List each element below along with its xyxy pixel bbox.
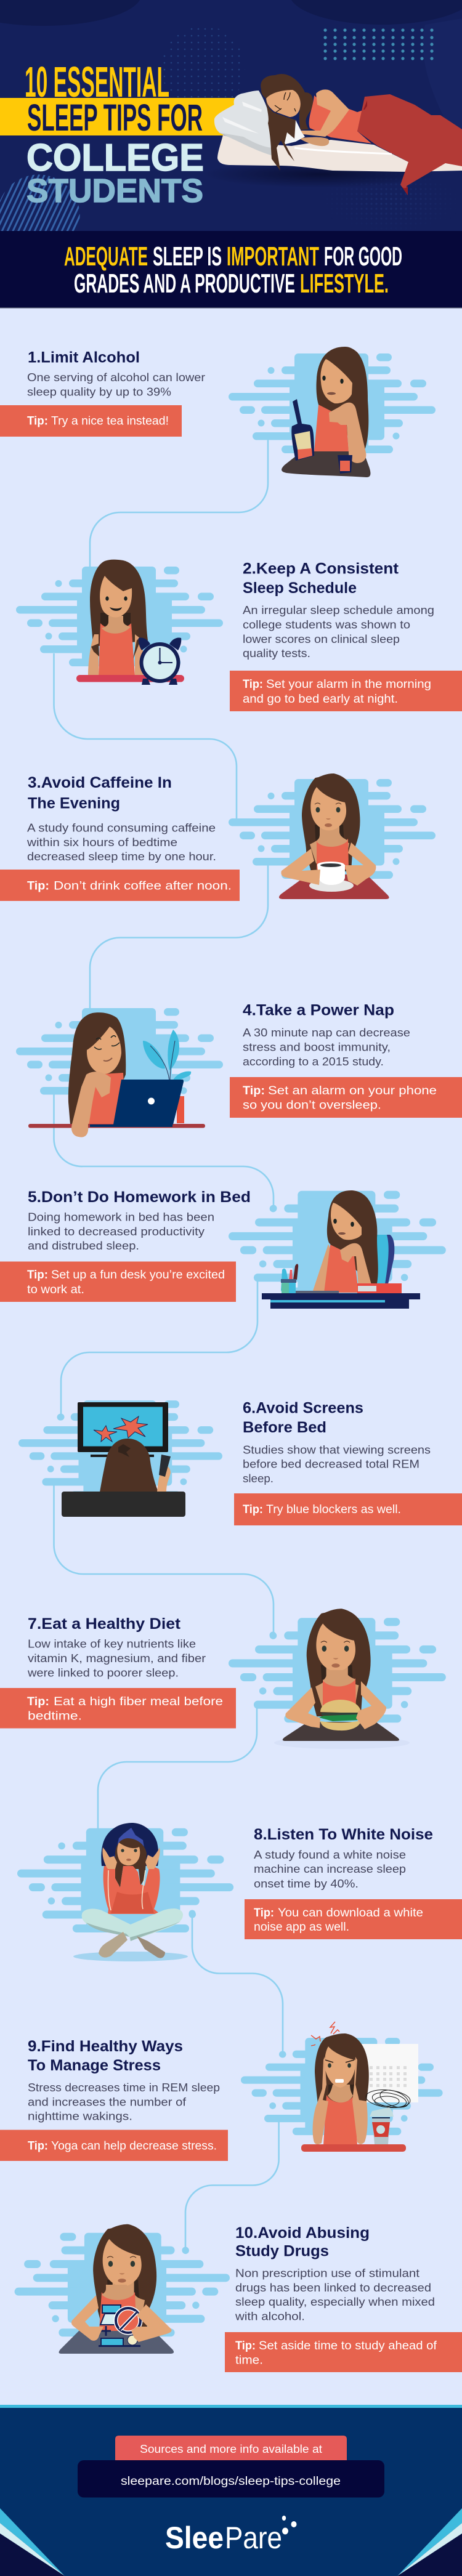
body text: Non prescription use of stimulant bbox=[235, 2267, 419, 2280]
illustration: girl rejecting pills bbox=[15, 2224, 230, 2354]
heading: 1.Limit Alcohol bbox=[28, 349, 140, 366]
body text: Low intake of key nutrients like bbox=[28, 1638, 196, 1650]
heading: 7.Eat a Healthy Diet bbox=[28, 1615, 181, 1633]
tip box: noise app as well. bbox=[254, 1921, 349, 1934]
illustration: girl with alcohol bbox=[229, 347, 436, 477]
panel: tip 5 homework in bed bbox=[0, 1189, 446, 1309]
body text bbox=[27, 1638, 206, 1679]
body text bbox=[28, 2081, 220, 2122]
body text: Doing homework in bed has been bbox=[28, 1211, 214, 1223]
heading bbox=[243, 560, 399, 597]
tip box bbox=[0, 405, 182, 437]
tip box: so you don’t oversleep. bbox=[243, 1099, 381, 1112]
tip box: Try blue blockers as well. bbox=[266, 1503, 401, 1516]
heading: Study Drugs bbox=[235, 2243, 329, 2260]
source url bbox=[78, 2460, 384, 2498]
heading: Before Bed bbox=[243, 1419, 326, 1436]
body text bbox=[243, 1027, 410, 1068]
body text: Stress decreases time in REM sleep bbox=[28, 2081, 220, 2094]
illustration: girl at desk bbox=[229, 1190, 446, 1309]
body text: with alcohol. bbox=[235, 2311, 305, 2323]
heading: 4.Take a Power Nap bbox=[243, 1001, 394, 1019]
illustration: girl with coffee bbox=[229, 773, 436, 899]
body text: A study found a white noise bbox=[254, 1849, 406, 1861]
tip box: bedtime. bbox=[28, 1710, 82, 1723]
tip box bbox=[0, 1261, 236, 1302]
illustration: girl napping at laptop bbox=[16, 1008, 223, 1137]
panel: tip 3 avoid caffeine bbox=[0, 773, 436, 901]
body text: nighttime wakings. bbox=[28, 2110, 132, 2122]
connector path between tips bbox=[54, 440, 286, 2254]
panel: tip 9 manage stress bbox=[0, 2022, 443, 2161]
heading bbox=[235, 2224, 370, 2260]
tip box: Tip: bbox=[243, 678, 263, 691]
heading: 5.Don’t Do Homework in Bed bbox=[28, 1189, 251, 1206]
tip box: Tip: bbox=[27, 1695, 49, 1708]
title: SLEEP TIPS FOR bbox=[27, 97, 203, 139]
body text: lower scores on clinical sleep bbox=[243, 633, 400, 645]
logo: Pare bbox=[225, 2521, 282, 2555]
intro band: SLEEP IS bbox=[153, 241, 222, 272]
title band bbox=[0, 98, 243, 135]
body text bbox=[243, 604, 434, 660]
tip box: Tip: bbox=[27, 879, 49, 893]
heading: 9.Find Healthy Ways bbox=[28, 2038, 183, 2055]
body text: according to a 2015 study. bbox=[243, 1056, 384, 1068]
intro band: ADEQUATE bbox=[64, 241, 148, 272]
body text: were linked to poorer sleep. bbox=[27, 1666, 179, 1679]
panel: tip 2 consistent sleep schedule bbox=[16, 560, 462, 711]
heading: 8.Listen To White Noise bbox=[254, 1826, 433, 1843]
body text: vitamin K, magnesium, and fiber bbox=[28, 1652, 206, 1665]
body text: and distrubed sleep. bbox=[28, 1240, 139, 1252]
tip box bbox=[245, 1899, 462, 1939]
tip box bbox=[230, 671, 462, 711]
body text: within six hours of bedtime bbox=[26, 836, 177, 849]
body text: before bed decreased total REM bbox=[243, 1458, 419, 1471]
sources label: Sources and more info available at bbox=[140, 2443, 322, 2455]
tip box: Set up a fun desk you’re excited bbox=[51, 1269, 225, 1282]
body text bbox=[27, 371, 205, 398]
logo bbox=[165, 2516, 297, 2555]
tip box: Tip: bbox=[28, 2139, 48, 2153]
tip box: Yoga can help decrease stress. bbox=[51, 2139, 217, 2153]
body text: A 30 minute nap can decrease bbox=[243, 1027, 410, 1039]
body text: machine can increase sleep bbox=[254, 1863, 406, 1875]
tip box bbox=[0, 2130, 228, 2161]
heading: 3.Avoid Caffeine In bbox=[28, 774, 172, 791]
title bbox=[25, 58, 204, 209]
intro band: IMPORTANT bbox=[227, 241, 319, 272]
panel: tip 8 white noise bbox=[17, 1823, 462, 1961]
panel: tip 1 limit alcohol bbox=[0, 347, 436, 477]
illustration: girl with burger bbox=[229, 1609, 446, 1749]
title: COLLEGE bbox=[26, 137, 204, 179]
heading: 10.Avoid Abusing bbox=[235, 2224, 370, 2242]
body text bbox=[28, 1211, 214, 1252]
tip box: Tip: bbox=[235, 2340, 256, 2352]
tip box: Tip: bbox=[243, 1503, 263, 1516]
heading: Sleep Schedule bbox=[243, 579, 357, 597]
body text bbox=[243, 1443, 431, 1485]
heading bbox=[243, 1399, 363, 1436]
body text: A study found consuming caffeine bbox=[27, 822, 216, 834]
sources label bbox=[115, 2436, 347, 2460]
body text: An irregular sleep schedule among bbox=[243, 604, 434, 616]
title: STUDENTS bbox=[26, 172, 203, 209]
body text: Studies show that viewing screens bbox=[243, 1443, 431, 1456]
body text: college students was shown to bbox=[243, 618, 410, 631]
footer bbox=[0, 2405, 462, 2576]
tip box: Tip: bbox=[27, 1269, 48, 1282]
body text: stress and boost immunity, bbox=[243, 1041, 391, 1053]
tip box bbox=[225, 2332, 462, 2372]
tip box: Tip: bbox=[27, 415, 48, 427]
panel: tip 4 power nap bbox=[16, 1001, 462, 1137]
tip box: Tip: bbox=[254, 1907, 274, 1920]
source url: sleepare.com/blogs/sleep-tips-college bbox=[121, 2475, 341, 2488]
tip box: Eat a high fiber meal before bbox=[54, 1695, 223, 1708]
intro band bbox=[0, 231, 462, 308]
corner accent left bbox=[0, 2508, 65, 2576]
tip box: time. bbox=[235, 2354, 263, 2367]
illustration: girl watching tv bbox=[18, 1400, 222, 1517]
body text: One serving of alcohol can lower bbox=[27, 371, 205, 384]
tip box: Set your alarm in the morning bbox=[266, 678, 431, 691]
illustration: stressed girl with calendar and coffee bbox=[241, 2022, 443, 2152]
tip box bbox=[230, 1077, 462, 1118]
body text: sleep quality, especially when mixed bbox=[235, 2296, 435, 2308]
illustration: girl with alarm clock bbox=[16, 560, 223, 685]
tip box bbox=[234, 1493, 462, 1525]
panel: tip 10 study drugs bbox=[15, 2224, 462, 2372]
body text: onset time by 40%. bbox=[254, 1878, 359, 1890]
heading: 6.Avoid Screens bbox=[243, 1399, 363, 1416]
body text bbox=[26, 822, 216, 863]
tip box: You can download a white bbox=[278, 1907, 423, 1920]
tip box: Set an alarm on your phone bbox=[268, 1084, 437, 1097]
tip box: to work at. bbox=[27, 1283, 84, 1296]
tip box: Don’t drink coffee after noon. bbox=[54, 879, 232, 893]
body text: linked to decreased productivity bbox=[28, 1225, 205, 1238]
heading: 2.Keep A Consistent bbox=[243, 560, 399, 578]
tip box: Tip: bbox=[243, 1084, 265, 1097]
title: 10 ESSENTIAL bbox=[25, 58, 169, 106]
tip box bbox=[0, 870, 240, 901]
tip box: Set aside time to study ahead of bbox=[259, 2340, 437, 2352]
illustration: sleeping girl bbox=[203, 74, 462, 195]
tip box: and go to bed early at night. bbox=[243, 693, 398, 706]
body text bbox=[254, 1849, 406, 1890]
body text: sleep quality by up to 39% bbox=[27, 386, 171, 398]
illustration: girl with pillow on head bbox=[17, 1823, 233, 1961]
body text: sleep. bbox=[243, 1472, 274, 1485]
body text: and increases the number of bbox=[28, 2096, 187, 2109]
intro band: GRADES AND A PRODUCTIVE bbox=[74, 269, 295, 299]
body text bbox=[235, 2267, 435, 2323]
corner accent right bbox=[397, 2508, 462, 2576]
heading bbox=[28, 774, 172, 812]
heading: To Manage Stress bbox=[28, 2057, 161, 2074]
body text: quality tests. bbox=[243, 647, 310, 660]
panel: tip 7 healthy diet bbox=[0, 1609, 446, 1749]
logo: Slee bbox=[165, 2521, 224, 2555]
intro band: LIFESTYLE. bbox=[300, 269, 389, 299]
body text: drugs has been linked to decreased bbox=[235, 2282, 431, 2294]
panel: tip 6 avoid screens bbox=[18, 1399, 462, 1525]
heading bbox=[28, 2038, 183, 2074]
header banner bbox=[0, 0, 462, 231]
heading: The Evening bbox=[28, 794, 120, 812]
tip box: Try a nice tea instead! bbox=[51, 415, 169, 427]
body text: decreased sleep time by one hour. bbox=[27, 850, 216, 863]
tip box bbox=[0, 1688, 236, 1728]
